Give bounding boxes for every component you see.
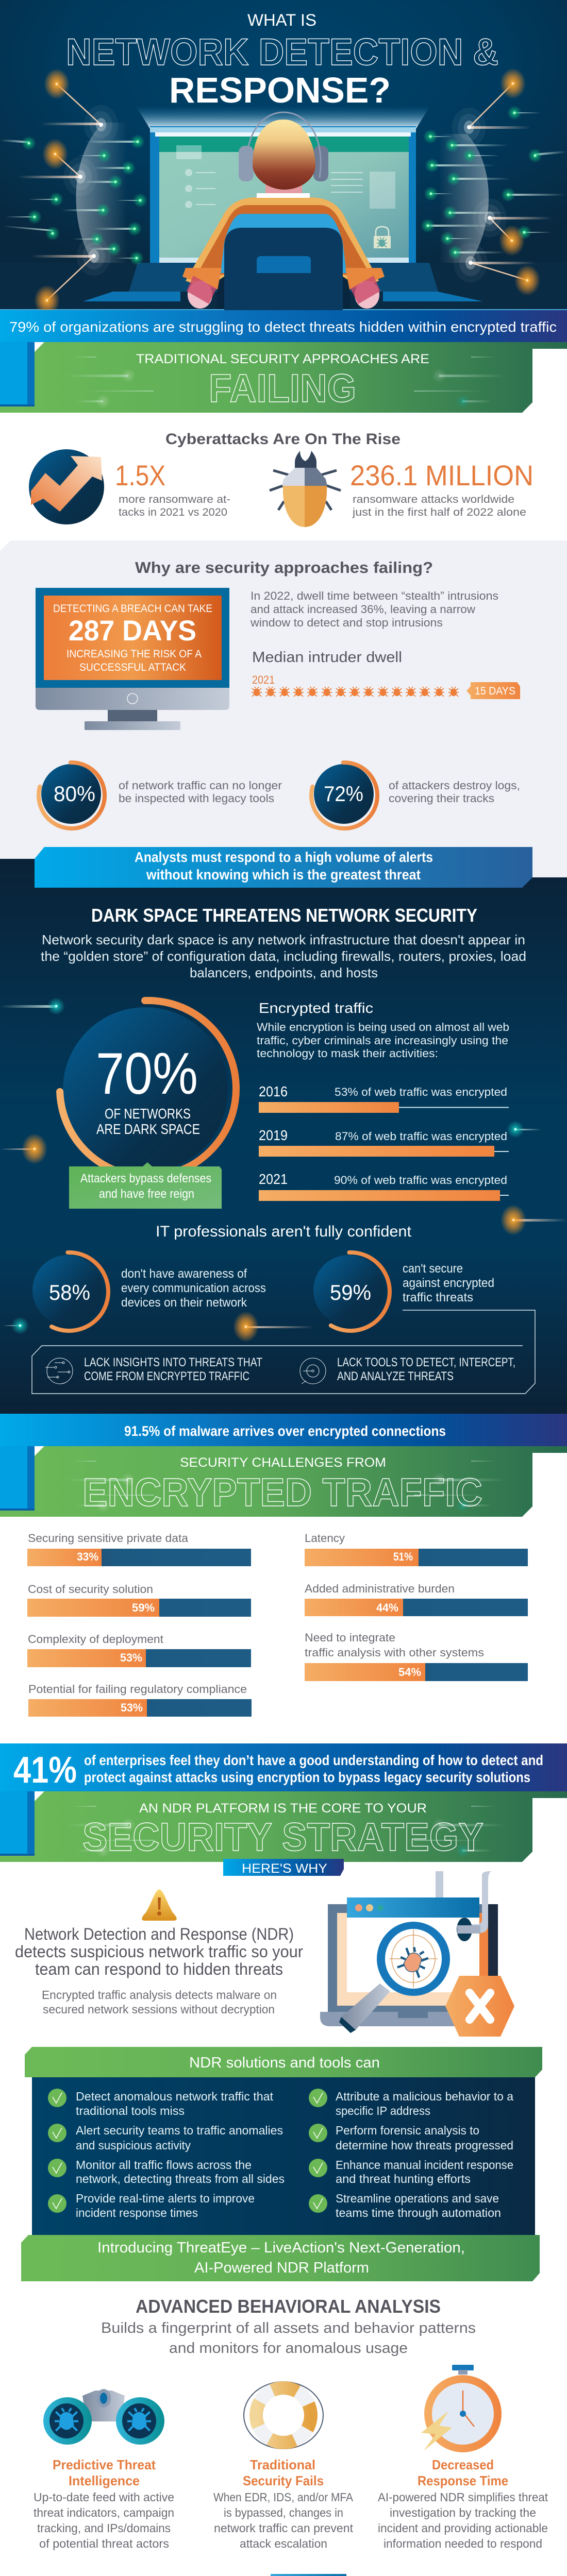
check items: right column: and threat hunting efforts — [336, 2172, 471, 2185]
check items: left column: Alert security teams to traffic anomalies — [76, 2124, 283, 2137]
stat: 59 percent: against encrypted — [403, 1276, 494, 1290]
bar: cost of security solution: 59% — [132, 1601, 155, 1614]
card: decreased response time: information needed to respond — [383, 2537, 542, 2550]
text: NDR definition: secured network sessions without decryption — [43, 2003, 275, 2016]
check items: left column: Detect anomalous network traffic that — [76, 2090, 274, 2103]
bar: need to integrate: 54% — [398, 1666, 421, 1679]
stat: 72 percent: of attackers destroy logs, — [389, 779, 520, 792]
stat: 1.5X: tacks in 2021 vs 2020 — [119, 506, 227, 518]
stat: 236.1 million: 236.1 MILLION — [350, 459, 533, 492]
heading: IT professionals: IT professionals aren't fully confident — [156, 1223, 412, 1240]
icon: stopwatch — [421, 2365, 502, 2452]
card: decreased response time: Response Time — [418, 2473, 508, 2488]
text: dwell time: and attack increased 36%, leaving a narrow — [251, 603, 475, 616]
panel: cyberattacks on the rise: Cyberattacks Are On The Rise — [165, 431, 401, 448]
stat: 80 percent: be inspected with legacy tools — [119, 792, 274, 805]
check items: left column: Monitor all traffic flows across the — [76, 2158, 252, 2172]
bar: potential for failing regulatory compliance — [28, 1683, 252, 1717]
banner: 41 percent enterprises: 41% — [13, 1750, 77, 1791]
banner: 79 percent statistic — [0, 310, 567, 342]
header: NDR solutions — [25, 2047, 542, 2077]
card: traditional security fails — [213, 2378, 354, 2550]
check items: right column: Enhance manual incident response — [336, 2158, 513, 2172]
title: NETWORK DETECTION & — [66, 31, 498, 73]
card: enriched findings — [212, 2574, 354, 2576]
heading: security challenges from encrypted traffic — [0, 1446, 567, 1517]
card: predictive threat intelligence: tracking, and IPs/domains — [37, 2521, 171, 2535]
check items: right column: determine how threats progressed — [336, 2139, 513, 2152]
bar: latency: 51% — [393, 1550, 413, 1563]
stat: 72 percent: 72% — [324, 782, 363, 806]
stat: 236.1 million — [350, 459, 533, 518]
bar: complexity of deployment: 53% — [120, 1651, 142, 1664]
stat: 80 percent: of network traffic can no longer — [119, 779, 282, 792]
check items: right column: Attribute a malicious behavior to a — [336, 2090, 513, 2103]
stat: 58 percent: 58% — [49, 1280, 90, 1304]
bar: cost of security solution: Cost of security solution — [28, 1583, 153, 1596]
stat: 80 percent: 80% — [54, 782, 95, 806]
text: dark space definition — [41, 932, 526, 980]
heading: advanced behavioral analysis: ADVANCED BEHAVIORAL ANALYSIS — [136, 2296, 441, 2317]
stat: 59 percent: 59% — [330, 1280, 371, 1304]
card: traditional security fails: network traffic can prevent — [214, 2521, 354, 2535]
check items: left column: network, detecting threats from all sides — [76, 2172, 285, 2185]
panel: outlined lack of insights box: COME FROM ENCRYPTED TRAFFIC — [84, 1369, 249, 1383]
text: encrypted traffic: Encrypted traffic — [259, 1000, 373, 1016]
bar: need to integrate: Need to integrate — [305, 1631, 395, 1644]
heading: NDR platform security strategy — [0, 1791, 567, 1876]
bar: added administrative burden: 44% — [376, 1601, 398, 1614]
icon: warning triangle — [142, 1889, 177, 1921]
card: decreased response time: investigation by tracking the — [390, 2506, 536, 2519]
panel: why are security approaches failing: Why are security approaches failing? — [135, 558, 433, 577]
chart: 70 percent of networks: OF NETWORKS — [105, 1106, 191, 1122]
bar chart: encrypted web traffic: 90% of web traffic was encrypted — [334, 1174, 507, 1187]
panel: why are security approaches failing — [0, 540, 567, 877]
label: here's why: HERE'S WHY — [242, 1861, 327, 1876]
card: traditional security fails: Traditional — [250, 2457, 315, 2472]
panel: outlined lack of insights box: AND ANALYZE THREATS — [337, 1369, 454, 1383]
panel: outlined lack of insights box: LACK TOOLS TO DETECT, INTERCEPT, — [337, 1355, 515, 1369]
card: decreased response time — [378, 2365, 548, 2550]
check items: left column: traditional tools miss — [76, 2104, 185, 2117]
floor — [0, 263, 567, 310]
illustration: laptop and magnifier — [320, 1871, 514, 2037]
banner: 41 percent enterprises — [0, 1743, 567, 1791]
stat: 80 percent — [38, 761, 282, 829]
check items: left column: incident response times — [76, 2206, 198, 2219]
card: predictive threat intelligence: threat indicators, campaign — [34, 2506, 174, 2519]
bar: complexity of deployment — [27, 1633, 251, 1667]
stat: 58 percent: devices on their network — [121, 1296, 247, 1310]
callout: attackers bypass defenses — [69, 1162, 222, 1209]
card: traditional security fails: Security Fails — [243, 2473, 324, 2488]
chart: median intruder dwell — [252, 649, 520, 699]
card: predictive threat intelligence: Predictive Threat — [53, 2457, 156, 2472]
chart: 70 percent of networks: ARE DARK SPACE — [96, 1121, 200, 1137]
heading: advanced behavioral analysis: and monitors for anomalous usage — [169, 2340, 408, 2357]
monitor with 287 days: DETECTING A BREACH CAN TAKE — [53, 603, 212, 615]
text: NDR definition: Network Detection and Response (NDR) — [24, 1925, 294, 1943]
bar: securing sensitive private data: 33% — [77, 1550, 98, 1563]
check items: right column — [309, 2089, 513, 2219]
heading: traditional security approaches are failing: FAILING — [209, 366, 356, 411]
chart: median intruder dwell: 2021 — [252, 673, 275, 686]
text: dark space definition: the “golden store” of configuration data, including firewalls, routers, proxies, load — [41, 948, 526, 964]
card: traditional security fails: attack escalation — [240, 2537, 327, 2550]
chart: 70 percent of networks: 70% — [96, 1041, 198, 1107]
monitor with 287 days: 287 DAYS — [69, 614, 196, 647]
callout: analysts: Analysts must respond to a high volume of alerts — [135, 849, 433, 865]
bar chart: encrypted web traffic — [259, 1083, 509, 1201]
icon: circuit circle — [45, 1358, 73, 1384]
text: NDR definition: team can respond to hidden threats — [35, 1960, 283, 1978]
monitor with 287 days: INCREASING THE RISK OF A — [66, 648, 202, 660]
bar: added administrative burden — [305, 1582, 528, 1616]
text: dark space definition: balancers, endpoints, and hosts — [190, 965, 378, 980]
text: dark space definition: Network security dark space is any network infrastructure that doesn't appear in — [42, 932, 525, 947]
room light — [136, 106, 430, 129]
monitor with 287 days — [36, 588, 229, 730]
bar: latency — [305, 1532, 528, 1566]
chart: median intruder dwell: Median intruder dwell — [252, 649, 402, 666]
check items: left column — [48, 2089, 285, 2219]
stat: 72 percent — [310, 761, 520, 829]
heading: advanced behavioral analysis — [101, 2296, 476, 2357]
panel: cyberattacks on the rise — [29, 431, 533, 527]
card: predictive threat intelligence — [34, 2389, 174, 2550]
text: dwell time — [250, 589, 498, 629]
stat: 236.1 million: ransomware attacks worldwide — [353, 494, 514, 505]
banner: introducing ThreatEye: AI-Powered NDR Platform — [194, 2260, 369, 2276]
bar: need to integrate — [305, 1631, 528, 1681]
stat: 58 percent: don't have awareness of — [121, 1267, 247, 1281]
bar chart: encrypted web traffic: 2016 — [259, 1083, 288, 1099]
panel: outlined lack of insights box: LACK INSIGHTS INTO THREATS THAT — [84, 1355, 262, 1369]
panel: dark space — [0, 847, 567, 1414]
stat: 59 percent — [310, 1251, 494, 1332]
icon: bug — [270, 451, 341, 527]
icon: browser windows — [225, 2574, 346, 2576]
icon: rising arrow globe — [29, 449, 104, 524]
heading: traditional security approaches are failing: TRADITIONAL SECURITY APPROACHES ARE — [136, 352, 429, 366]
callout: attackers bypass defenses: Attackers bypass defenses — [80, 1172, 211, 1185]
check items: right column: specific IP address — [336, 2104, 430, 2117]
label: here's why — [223, 1859, 344, 1876]
stat: 59 percent: traffic threats — [403, 1291, 473, 1304]
stat: 58 percent: every communication across — [121, 1281, 266, 1295]
stat: 236.1 million: just in the first half of 2022 alone — [352, 506, 526, 518]
bar chart: encrypted web traffic: 2019 — [259, 1127, 288, 1143]
bar: complexity of deployment: Complexity of deployment — [28, 1633, 163, 1646]
bar chart: encrypted web traffic: 2021 — [259, 1171, 288, 1187]
heading: security challenges from encrypted traffic: SECURITY CHALLENGES FROM — [180, 1455, 386, 1470]
monitor with 287 days: SUCCESSFUL ATTACK — [79, 662, 186, 673]
bar: cost of security solution — [27, 1583, 251, 1617]
title — [66, 11, 498, 110]
decorative nodes: dark space — [0, 997, 567, 1342]
callout: analysts: without knowing which is the greatest threat — [146, 867, 421, 883]
bar chart: security challenges — [27, 1532, 528, 1717]
card: predictive threat intelligence: Intelligence — [69, 2473, 140, 2488]
icon: binoculars — [43, 2389, 164, 2445]
stat: 1.5X: 1.5X — [115, 459, 165, 492]
bar: securing sensitive private data — [27, 1532, 251, 1566]
banner: introducing ThreatEye — [21, 2235, 540, 2281]
card: traditional security fails: is bypassed, changes in — [224, 2506, 343, 2519]
title: WHAT IS — [247, 11, 316, 29]
check items: right column: Perform forensic analysis to — [336, 2124, 479, 2137]
stat: 58 percent — [28, 1251, 266, 1332]
text: NDR definition — [15, 1925, 303, 2016]
heading: dark space threatens network security: DARK SPACE THREATENS NETWORK SECURITY — [91, 905, 477, 926]
heading: NDR platform security strategy: AN NDR PLATFORM IS THE CORE TO YOUR — [139, 1801, 427, 1816]
force field glow — [76, 123, 489, 263]
heading: advanced behavioral analysis: Builds a fingerprint of all assets and behavior patterns — [101, 2320, 476, 2336]
text: encrypted traffic — [257, 1000, 509, 1060]
text: dwell time: window to detect and stop intrusions — [250, 616, 443, 629]
bar chart: encrypted web traffic: 53% of web traffic was encrypted — [335, 1086, 507, 1098]
banner: 91.5 percent malware — [0, 1414, 567, 1446]
stat: 59 percent: can't secure — [403, 1262, 463, 1276]
text: NDR definition: detects suspicious network traffic so your — [15, 1942, 303, 1961]
network nodes — [0, 68, 567, 316]
card: decreased response time: Decreased — [432, 2457, 494, 2472]
bar: need to integrate: traffic analysis with other systems — [305, 1646, 484, 1659]
icon: target circle — [300, 1358, 326, 1384]
stat: 1.5X: more ransomware at- — [119, 494, 230, 505]
text: dwell time: In 2022, dwell time between “stealth” intrusions — [251, 589, 498, 602]
heading: traditional security approaches are failing — [0, 342, 567, 413]
analyst figure — [182, 112, 385, 310]
monitor window — [150, 126, 416, 263]
card: predictive threat intelligence: Up-to-date feed with active — [34, 2490, 174, 2504]
bar chart: encrypted web traffic: 87% of web traffic was encrypted — [335, 1130, 507, 1143]
callout: attackers bypass defenses: and have free reign — [99, 1187, 194, 1201]
card: decreased response time: incident and providing actionable — [378, 2521, 548, 2535]
check items: right column: Streamline operations and save — [336, 2192, 499, 2205]
bar: potential for failing regulatory compliance: 53% — [121, 1701, 143, 1714]
bar: latency: Latency — [305, 1532, 345, 1545]
callout: analysts — [35, 847, 532, 888]
panel: hero — [0, 0, 567, 316]
heading: security challenges from encrypted traffic: ENCRYPTED TRAFFIC — [82, 1470, 482, 1515]
bar: added administrative burden: Added administrative burden — [305, 1582, 455, 1595]
title: RESPONSE? — [169, 70, 391, 110]
chart: 70 percent of networks — [57, 997, 239, 1180]
panel: NDR solutions and tools — [21, 2047, 542, 2281]
heading: NDR platform security strategy: SECURITY STRATEGY — [82, 1815, 483, 1859]
card: predictive threat intelligence: of potential threat actors — [39, 2537, 169, 2550]
stat: 72 percent: covering their tracks — [389, 792, 494, 805]
text: NDR definition: Encrypted traffic analysis detects malware on — [42, 1988, 277, 2002]
check items: left column: and suspicious activity — [76, 2139, 191, 2152]
panel: outlined lack of insights box — [32, 1310, 535, 1394]
check items: right column: teams time through automation — [336, 2206, 501, 2219]
header: NDR solutions: NDR solutions and tools can — [189, 2055, 380, 2071]
check items: left column: Provide real-time alerts to improve — [76, 2192, 255, 2205]
card: decreased response time: AI-powered NDR simplifies threat — [378, 2490, 548, 2504]
icon: lifebuoy — [244, 2378, 323, 2452]
stat: 1.5X — [115, 459, 230, 518]
text: encrypted traffic: technology to mask their activities: — [257, 1047, 438, 1060]
text: encrypted traffic: While encryption is being used on almost all web — [257, 1021, 509, 1033]
banner: 91.5 percent malware: 91.5% of malware arrives over encrypted connections — [124, 1423, 446, 1439]
bar: potential for failing regulatory compliance: Potential for failing regulatory compliance — [28, 1683, 247, 1696]
banner: introducing ThreatEye: Introducing ThreatEye – LiveAction's Next-Generation, — [97, 2240, 465, 2256]
card: traditional security fails: When EDR, IDS, and/or MFA — [213, 2490, 354, 2504]
banner: 79 percent statistic: 79% of organizations are struggling to detect threats hidden within encrypted traffic — [9, 319, 557, 335]
bar: securing sensitive private data: Securing sensitive private data — [28, 1532, 189, 1545]
text: encrypted traffic: traffic, cyber criminals are increasingly using the — [257, 1034, 508, 1047]
chart: median intruder dwell: 15 DAYS — [475, 685, 515, 697]
